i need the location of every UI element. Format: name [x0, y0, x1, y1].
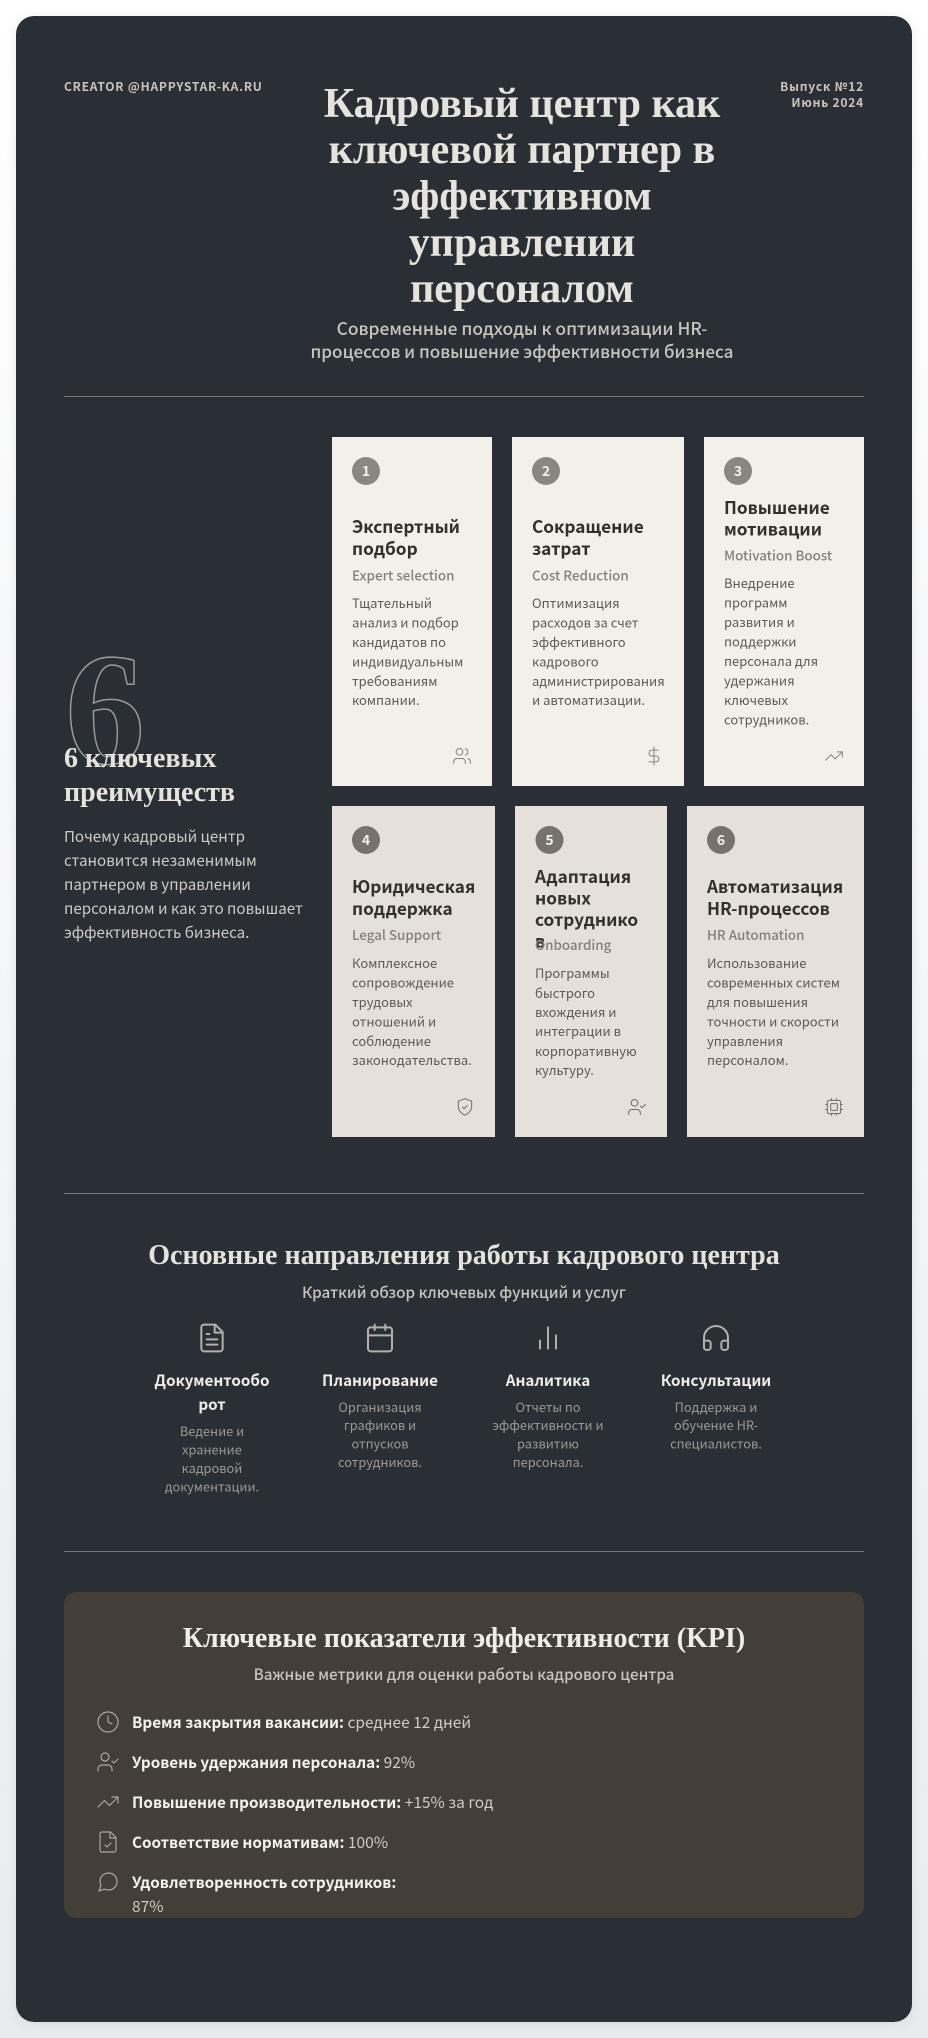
card 3 — [704, 437, 864, 786]
title: Кадровый центр как — [324, 81, 721, 127]
card 2: и автоматизации. — [532, 690, 645, 709]
card 1 — [332, 437, 492, 786]
card 6: Использование — [707, 953, 806, 972]
icon: trending up — [826, 752, 842, 760]
direction: documents: хранение — [182, 1440, 242, 1458]
direction: consulting: специалистов. — [670, 1434, 762, 1452]
direction: planning: сотрудников. — [338, 1452, 422, 1471]
card 2: кадрового — [532, 652, 599, 670]
card 2: затрат — [532, 535, 591, 560]
card 1: Тщательный — [352, 593, 432, 612]
card 1: Экспертный — [352, 513, 460, 538]
card 3: персонала для — [724, 651, 818, 670]
card 5 — [515, 806, 667, 1137]
direction: analytics: Отчеты по — [515, 1397, 581, 1416]
KPI: satisfaction: 87% — [132, 1895, 163, 1917]
card 3: программ — [724, 592, 788, 612]
subtitle: Современные подходы к оптимизации HR- — [337, 316, 707, 341]
card 3: Motivation Boost — [724, 544, 833, 564]
card 2: Cost Reduction — [532, 564, 629, 584]
card 1: 1 — [362, 461, 370, 481]
card 4: Комплексное — [352, 953, 437, 972]
issue info: Июнь 2024 — [791, 94, 864, 111]
left description: персоналом и как это повышает — [64, 897, 303, 919]
title: персоналом — [410, 266, 634, 312]
icon: dollar — [649, 747, 659, 765]
card 5: интеграции в — [535, 1021, 621, 1040]
card 6: для повышения — [707, 992, 808, 1011]
card 6: управления — [707, 1031, 783, 1050]
direction: planning — [322, 1325, 438, 1471]
card 5: культуру. — [535, 1060, 594, 1079]
left description: становится незаменимым — [64, 849, 257, 871]
card 4: Legal Support — [352, 924, 442, 944]
big outline number 6: 6 — [65, 620, 145, 798]
card 4: трудовых — [352, 992, 413, 1011]
title: ключевой партнер в — [329, 127, 715, 173]
KPI heading: Ключевые показатели эффективности (KPI) — [183, 1623, 745, 1654]
card 6: 6 — [717, 830, 725, 850]
KPI: productivity: Повышение производительности: +15% за год — [132, 1791, 493, 1813]
card 4: 4 — [362, 830, 370, 850]
card 4: поддержка — [352, 895, 453, 920]
left description — [64, 825, 303, 943]
icon: shield check — [458, 1099, 472, 1115]
card 2: Оптимизация — [532, 593, 620, 612]
issue info: Выпуск №12 — [780, 78, 864, 95]
card 4: отношений и — [352, 1012, 436, 1030]
card 2: Сокращение — [532, 513, 644, 538]
direction: documents: Ведение и — [180, 1421, 244, 1440]
card 3: удержания — [724, 670, 795, 690]
card 6: современных систем — [707, 972, 840, 992]
card 3: Внедрение — [724, 573, 795, 592]
card 5: Onboarding — [535, 934, 612, 954]
direction: documents — [155, 1325, 269, 1496]
panel: KPI — [64, 1592, 864, 1918]
direction: documents: документации. — [165, 1476, 259, 1496]
icon: cpu — [826, 1099, 842, 1115]
card 1: компании. — [352, 690, 420, 709]
KPI: retention: Уровень удержания персонала: 92% — [132, 1751, 415, 1773]
card 2: администрирования — [532, 671, 665, 690]
KPI: satisfaction — [99, 1871, 396, 1917]
section subtitle: Краткий обзор ключевых функций и услуг — [302, 1281, 626, 1303]
card 6: HR Automation — [707, 924, 804, 944]
direction: consulting: Поддержка и — [675, 1397, 757, 1416]
section heading: directions: Основные направления работы кадрового центра — [148, 1240, 780, 1271]
issue info — [780, 78, 864, 111]
KPI: time to close: Время закрытия вакансии: среднее 12 дней — [132, 1711, 471, 1733]
direction: analytics — [492, 1327, 604, 1471]
title: управлении — [409, 220, 635, 266]
card 5: корпоративную — [535, 1041, 637, 1060]
card 1: индивидуальным — [352, 652, 463, 670]
card 3: поддержки — [724, 632, 797, 650]
direction: consulting: обучение HR- — [674, 1415, 758, 1434]
card 6: точности и скорости — [707, 1012, 839, 1030]
card 3: сотрудников. — [724, 710, 809, 728]
card 5: новых — [535, 884, 591, 910]
card 4: законодательства. — [352, 1050, 472, 1069]
left description: эффективность бизнеса. — [64, 921, 249, 943]
card 3: мотивации — [724, 516, 822, 540]
card 5: Адаптация — [534, 863, 631, 888]
card 2 — [512, 437, 684, 786]
icon: user check — [629, 1099, 645, 1114]
subtitle: процессов и повышение эффективности бизнеса — [311, 338, 733, 363]
direction: analytics: эффективности и — [492, 1415, 604, 1434]
card 3: 3 — [734, 461, 742, 481]
card 4: соблюдение — [352, 1031, 431, 1050]
left heading: преимуществ — [64, 777, 235, 808]
left heading: 6 ключевых — [64, 743, 216, 774]
creator label: CREATOR @HAPPYSTAR-KA.RU — [64, 78, 263, 95]
KPI: satisfaction: Удовлетворенность сотрудников: — [132, 1871, 396, 1893]
card 1: кандидатов по — [352, 632, 446, 651]
card 6 — [687, 806, 864, 1137]
direction: documents: Документообо — [155, 1369, 269, 1391]
card 4: сопровождение — [352, 972, 454, 992]
direction: analytics: Аналитика — [505, 1369, 590, 1391]
card 5: вхождения и — [535, 1002, 616, 1021]
card 3: Повышение — [724, 494, 830, 519]
KPI subtitle: Важные метрики для оценки работы кадрового центра — [254, 1663, 674, 1685]
card 2: расходов за счет — [532, 612, 639, 632]
KPI: compliance: Соответствие нормативам: 100% — [132, 1831, 388, 1853]
card 6: Автоматизация — [706, 873, 843, 898]
direction: planning: графиков и — [344, 1415, 416, 1434]
direction: analytics: персонала. — [513, 1452, 583, 1471]
card 4 — [332, 806, 495, 1137]
card 2: 2 — [542, 461, 550, 481]
card 5: в — [535, 928, 545, 952]
subtitle — [311, 316, 733, 363]
direction: documents: рот — [198, 1393, 226, 1415]
card 3: развития и — [724, 612, 795, 631]
direction: documents: кадровой — [182, 1458, 242, 1477]
card 3: ключевых — [724, 690, 788, 709]
card 1: подбор — [352, 535, 418, 560]
direction: planning: отпусков — [351, 1434, 409, 1452]
left description: партнером в управлении — [64, 873, 251, 895]
left description: Почему кадровый центр — [64, 825, 245, 847]
direction: planning: Организация — [338, 1397, 422, 1416]
title: эффективном — [392, 174, 652, 220]
direction: consulting — [661, 1326, 771, 1452]
card 6: персоналом. — [707, 1050, 788, 1069]
card 5: быстрого — [535, 983, 595, 1002]
card 1: Expert selection — [352, 564, 454, 584]
left heading — [64, 743, 235, 808]
card 4: Юридическая — [352, 873, 475, 898]
card 6: HR-процессов — [707, 895, 830, 920]
card 1: требованиям — [352, 671, 437, 690]
card 2: эффективного — [532, 632, 626, 651]
title — [324, 81, 721, 312]
direction: analytics: развитию — [517, 1434, 579, 1452]
card 5: сотруднико — [535, 906, 638, 931]
card 5: 5 — [545, 830, 554, 850]
card 1: анализ и подбор — [352, 612, 459, 632]
card 5: Программы — [535, 963, 610, 982]
direction: planning: Планирование — [322, 1369, 438, 1391]
direction: consulting: Консультации — [661, 1369, 771, 1391]
icon: users — [454, 748, 470, 763]
